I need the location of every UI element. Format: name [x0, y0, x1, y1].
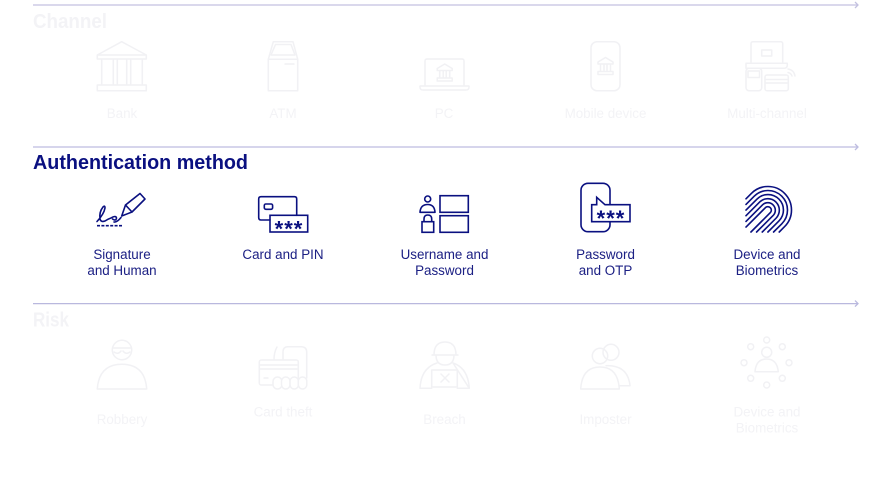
panel: risk row	[97, 337, 800, 436]
label: Username and Password: Username and	[401, 247, 488, 262]
label: Device and Biometrics: Device and	[734, 405, 800, 420]
label: Imposter: Imposter	[579, 412, 632, 427]
panel: channel row	[97, 42, 807, 121]
icon: signature and pen	[97, 194, 145, 226]
panel: authentication row	[87, 183, 800, 278]
label: Signature and Human: Signature	[93, 247, 151, 262]
label: ATM: ATM	[269, 106, 297, 121]
label: PC: PC	[435, 106, 454, 121]
label: Breach: Breach	[423, 412, 466, 427]
label: Card and PIN: Card and PIN	[242, 247, 324, 262]
icon: mobile device	[591, 42, 620, 91]
arrow: channel timeline	[33, 2, 858, 8]
icon: robbery	[97, 340, 147, 389]
icon: bank	[97, 42, 146, 91]
icon: card theft	[259, 347, 307, 389]
heading: Channel: Channel	[33, 11, 107, 33]
label: Password and OTP: and OTP	[579, 263, 632, 278]
icon: username and password	[420, 196, 468, 232]
heading: Authentication method: Authentication method	[33, 152, 248, 174]
label: Username and Password: Password	[415, 263, 474, 278]
label: Signature and Human: and Human	[87, 263, 157, 278]
label: Device and Biometrics: Biometrics	[736, 421, 799, 436]
label: Device and Biometrics: Biometrics	[736, 263, 799, 278]
icon: fingerprint	[746, 187, 791, 232]
label: Multi-channel: Multi-channel	[727, 106, 807, 121]
label: Mobile device: Mobile device	[565, 106, 646, 121]
icon: breach	[420, 342, 469, 388]
label: Bank: Bank	[107, 106, 138, 121]
label: Robbery: Robbery	[97, 412, 148, 427]
icon: multi-channel	[746, 42, 795, 91]
icon: password and OTP: ***	[597, 206, 625, 231]
icon: card and PIN: ***	[275, 216, 303, 242]
icon: PC	[420, 59, 469, 90]
arrow: authentication timeline	[33, 144, 858, 150]
icon: device and biometrics risk	[741, 337, 792, 388]
icon: password and OTP	[581, 183, 630, 232]
label: Card theft: Card theft	[254, 405, 313, 420]
label: Password and OTP: Password	[576, 247, 635, 262]
label: Device and Biometrics: Device and	[734, 247, 800, 262]
icon: imposter	[581, 344, 630, 389]
heading: Risk: Risk	[33, 310, 70, 332]
icon: card and PIN	[259, 197, 308, 242]
arrow: risk timeline	[33, 301, 858, 307]
icon: ATM	[268, 42, 298, 91]
